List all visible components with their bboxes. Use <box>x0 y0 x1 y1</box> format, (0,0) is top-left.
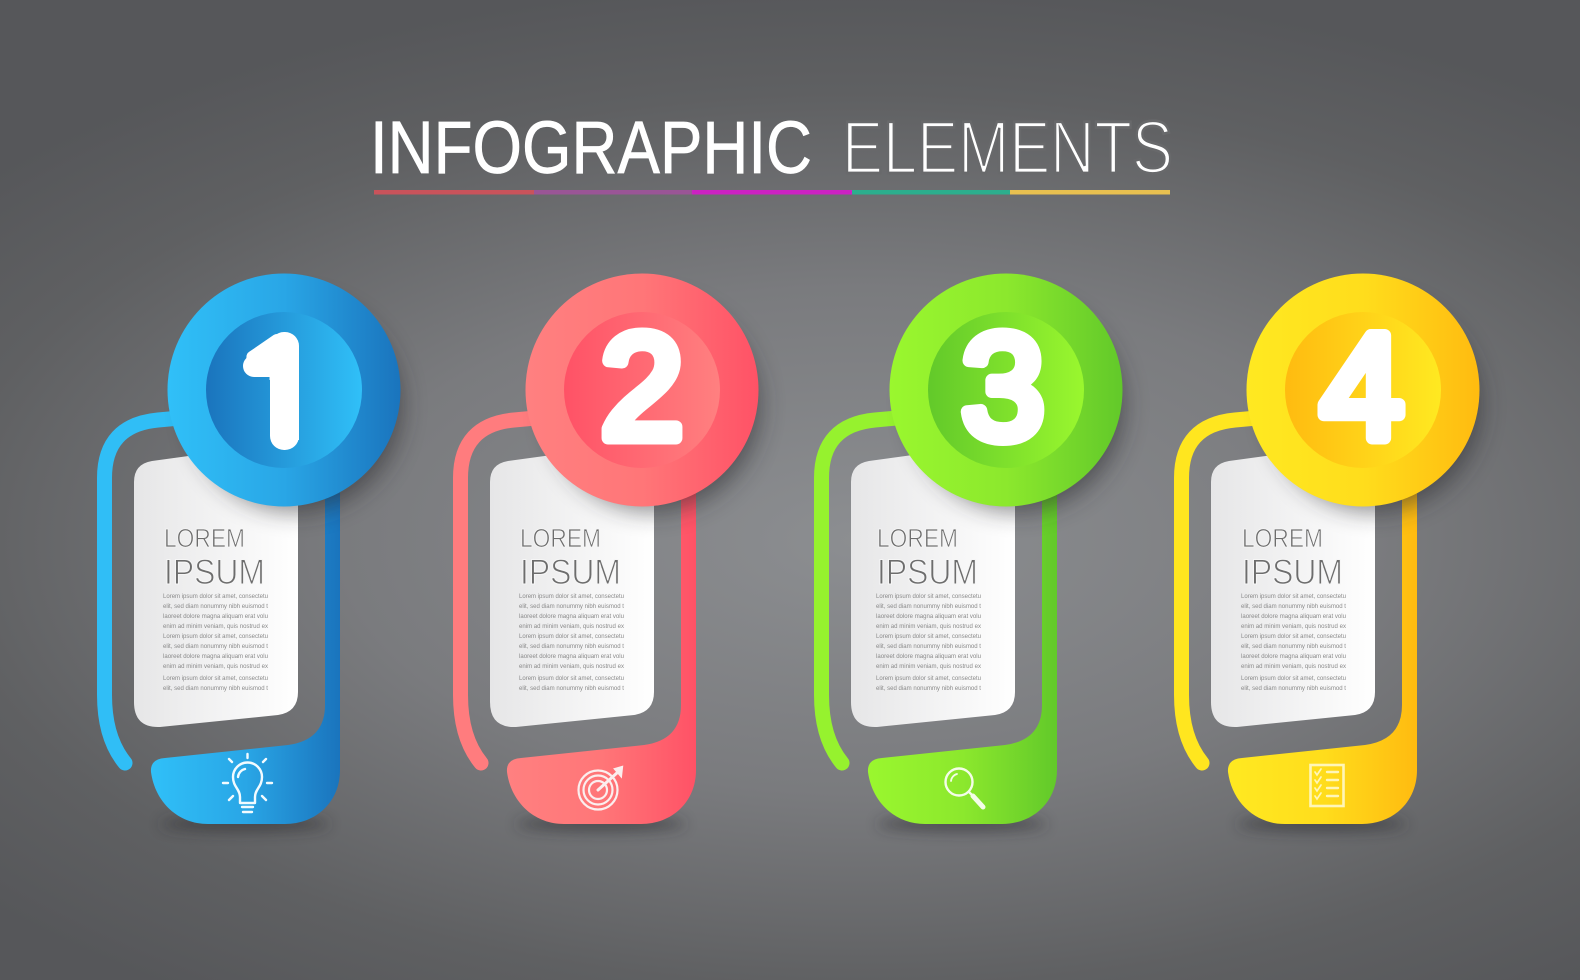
card heading: LOREM <box>164 523 245 553</box>
card body text: enim ad minim veniam, quis nostrud ex <box>1241 664 1346 670</box>
card body text: Lorem ipsum dolor sit amet, consectetu <box>876 634 981 640</box>
base tab with right stroke <box>151 480 340 824</box>
card body text: elit, sed diam nonummy nibh euismod t <box>1241 644 1346 650</box>
card body text: Lorem ipsum dolor sit amet, consectetu <box>163 634 268 640</box>
base tab with right stroke <box>868 480 1057 824</box>
card body text <box>1241 594 1346 692</box>
panel: step 2 <box>460 274 760 831</box>
title: ELEMENTS <box>842 106 1173 189</box>
icon: magnifier <box>946 768 983 807</box>
card heading: LOREM <box>520 523 601 553</box>
card body text: laoreet dolore magna aliquam erat volu <box>519 614 624 620</box>
card body text: elit, sed diam nonummy nibh euismod t <box>519 686 624 692</box>
card body text: Lorem ipsum dolor sit amet, consectetu <box>1241 594 1346 600</box>
white card <box>134 441 298 727</box>
icon: target <box>578 767 622 810</box>
left connector stroke <box>822 418 897 763</box>
card body text: Lorem ipsum dolor sit amet, consectetu <box>519 594 624 600</box>
card heading: IPSUM <box>520 553 621 592</box>
card body text: laoreet dolore magna aliquam erat volu <box>1241 654 1346 660</box>
circle shadow <box>190 300 402 512</box>
card body text: enim ad minim veniam, quis nostrud ex <box>876 624 981 630</box>
card body text: elit, sed diam nonummy nibh euismod t <box>876 604 981 610</box>
card body text: Lorem ipsum dolor sit amet, consectetu <box>519 634 624 640</box>
card body text: Lorem ipsum dolor sit amet, consectetu <box>1241 634 1346 640</box>
outer circle <box>890 274 1122 506</box>
outer circle <box>526 274 758 506</box>
card body text: enim ad minim veniam, quis nostrud ex <box>519 664 624 670</box>
card heading <box>1242 523 1343 592</box>
card body text <box>519 594 624 692</box>
card heading: IPSUM <box>1242 553 1343 592</box>
card body text <box>876 594 981 692</box>
card heading <box>164 523 265 592</box>
inner circle <box>564 312 720 468</box>
shadow under base <box>877 817 1047 831</box>
card body text: elit, sed diam nonummy nibh euismod t <box>519 644 624 650</box>
card body text: Lorem ipsum dolor sit amet, consectetu <box>163 594 268 600</box>
card heading: IPSUM <box>164 553 265 592</box>
card body text: elit, sed diam nonummy nibh euismod t <box>163 644 268 650</box>
base tab with right stroke <box>1228 480 1417 824</box>
number 3: 3 <box>962 303 1044 470</box>
card body text: elit, sed diam nonummy nibh euismod t <box>876 686 981 692</box>
card body text: laoreet dolore magna aliquam erat volu <box>163 614 268 620</box>
white card <box>1211 441 1375 727</box>
inner circle <box>928 312 1084 468</box>
card body text: Lorem ipsum dolor sit amet, consectetu <box>876 676 981 682</box>
card body text: elit, sed diam nonummy nibh euismod t <box>1241 686 1346 692</box>
card body text: Lorem ipsum dolor sit amet, consectetu <box>1241 676 1346 682</box>
card heading: LOREM <box>877 523 958 553</box>
white card <box>851 441 1015 727</box>
card body text: laoreet dolore magna aliquam erat volu <box>876 654 981 660</box>
circle shadow <box>912 300 1124 512</box>
title: INFOGRAPHIC <box>370 106 812 189</box>
inner circle <box>206 312 362 468</box>
card body text: elit, sed diam nonummy nibh euismod t <box>1241 604 1346 610</box>
left connector stroke <box>104 418 180 763</box>
card body text: laoreet dolore magna aliquam erat volu <box>1241 614 1346 620</box>
left connector stroke <box>1182 418 1257 763</box>
icon: checklist <box>1310 765 1344 806</box>
card heading <box>520 523 621 592</box>
card body text: Lorem ipsum dolor sit amet, consectetu <box>876 594 981 600</box>
panel: step 1 <box>104 274 402 831</box>
card heading: LOREM <box>1242 523 1323 553</box>
base tab with right stroke <box>507 480 696 824</box>
card body text: elit, sed diam nonummy nibh euismod t <box>519 604 624 610</box>
shadow under base <box>1237 817 1407 831</box>
number 2: 2 <box>601 303 683 470</box>
panel: step 4 <box>1182 274 1481 831</box>
card body text: enim ad minim veniam, quis nostrud ex <box>163 664 268 670</box>
outer circle <box>168 274 400 506</box>
card body text: laoreet dolore magna aliquam erat volu <box>519 654 624 660</box>
card body text: laoreet dolore magna aliquam erat volu <box>876 614 981 620</box>
circle shadow <box>1269 300 1481 512</box>
card heading: IPSUM <box>877 553 978 592</box>
title <box>370 106 1173 194</box>
card body text: enim ad minim veniam, quis nostrud ex <box>519 624 624 630</box>
card body text <box>163 594 268 692</box>
number 1 <box>243 332 299 450</box>
card body text: Lorem ipsum dolor sit amet, consectetu <box>519 676 624 682</box>
number 1: 1 <box>239 308 321 475</box>
shadow under base <box>516 817 686 831</box>
card body text: elit, sed diam nonummy nibh euismod t <box>163 686 268 692</box>
number 4: 4 <box>1321 303 1403 470</box>
card body text: enim ad minim veniam, quis nostrud ex <box>876 664 981 670</box>
panel: step 3 <box>822 274 1124 831</box>
white card <box>490 441 654 727</box>
inner circle <box>1285 312 1441 468</box>
circle shadow <box>548 300 760 512</box>
card body text: elit, sed diam nonummy nibh euismod t <box>876 644 981 650</box>
card body text: enim ad minim veniam, quis nostrud ex <box>163 624 268 630</box>
card body text: Lorem ipsum dolor sit amet, consectetu <box>163 676 268 682</box>
outer circle <box>1246 274 1480 506</box>
card body text: enim ad minim veniam, quis nostrud ex <box>1241 624 1346 630</box>
left connector stroke <box>460 418 536 763</box>
card body text: laoreet dolore magna aliquam erat volu <box>163 654 268 660</box>
card heading <box>877 523 978 592</box>
icon: light bulb <box>223 754 272 812</box>
card body text: elit, sed diam nonummy nibh euismod t <box>163 604 268 610</box>
shadow under base <box>160 817 330 831</box>
